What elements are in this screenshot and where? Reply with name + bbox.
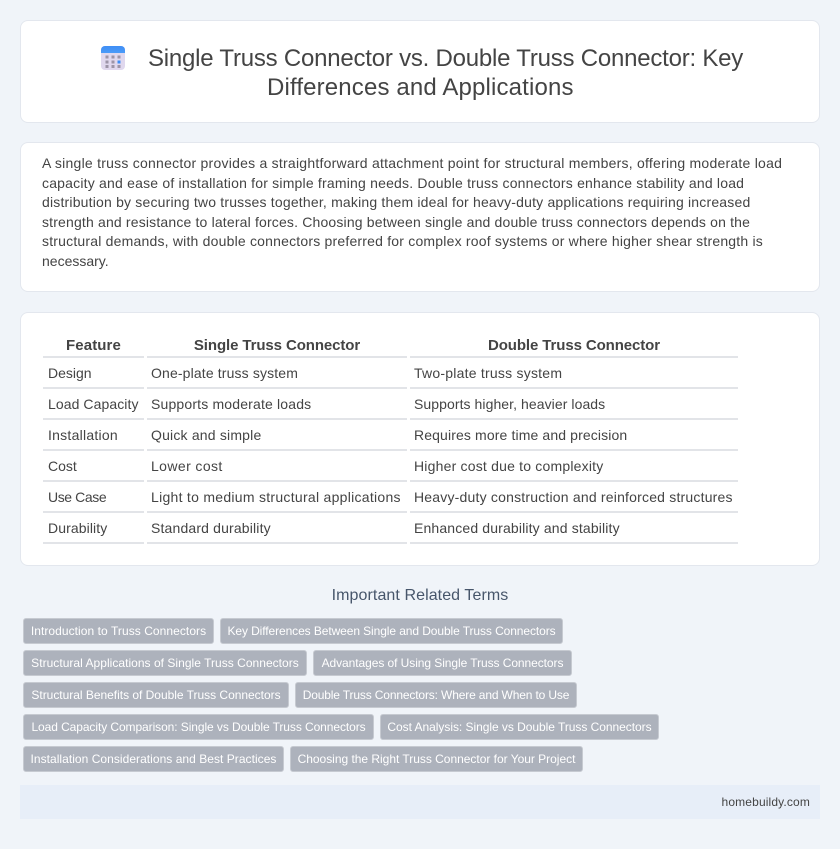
tag: Choosing the Right Truss Connector for Your Project xyxy=(298,752,575,766)
tag xyxy=(23,714,374,740)
table header: Feature: Feature xyxy=(66,337,121,354)
tag: Structural Benefits of Double Truss Connectors xyxy=(31,688,281,702)
tag: Key Differences Between Single and Double Truss Connectors xyxy=(227,624,556,638)
paragraph line 2: capacity and ease of installation for simple framing needs. Double truss connectors enhance stability and load xyxy=(42,174,744,190)
tag: Installation Considerations and Best Practices xyxy=(30,752,276,766)
Installation single: Quick and simple xyxy=(151,427,261,443)
tag xyxy=(290,746,583,772)
tag xyxy=(23,618,214,644)
table header: Single Truss Connector: Single Truss Connector xyxy=(194,337,360,354)
tag: Cost Analysis: Single vs Double Truss Connectors xyxy=(387,720,652,734)
row: Cost: Cost xyxy=(48,458,77,474)
paragraph line 1: A single truss connector provides a straightforward attachment point for structural members, offering moderate load xyxy=(42,155,782,171)
row: Use Case: Use Case xyxy=(48,489,106,505)
tag: Structural Applications of Single Truss Connectors xyxy=(31,656,299,670)
Cost double: Higher cost due to complexity xyxy=(414,458,603,474)
paragraph line 4: strength and resistance to lateral forces. Choosing between single and double truss connectors depends on the xyxy=(42,214,750,230)
tag: Load Capacity Comparison: Single vs Double Truss Connectors xyxy=(31,720,366,734)
tag: Advantages of Using Single Truss Connectors xyxy=(322,656,563,670)
tag: Introduction to Truss Connectors xyxy=(31,624,206,638)
title line 1: Single Truss Connector vs. Double Truss Connector: Key xyxy=(148,45,743,72)
tag xyxy=(23,746,284,772)
Installation double: Requires more time and precision xyxy=(414,427,627,443)
row: Durability: Durability xyxy=(48,520,107,536)
tag: Double Truss Connectors: Where and When to Use xyxy=(303,688,569,702)
paragraph line 5: structural demands, with double connectors preferred for complex roof systems or where higher shear strength is xyxy=(42,233,763,249)
Use Case single: Light to medium structural applications xyxy=(151,489,401,505)
Load single: Supports moderate loads xyxy=(151,396,311,412)
row: Installation: Installation xyxy=(48,427,118,443)
Load double: Supports higher, heavier loads xyxy=(414,396,605,412)
Design single: One-plate truss system xyxy=(151,365,298,381)
Durability double: Enhanced durability and stability xyxy=(414,520,620,536)
title line 2: Differences and Applications xyxy=(267,74,574,101)
tag xyxy=(295,682,577,708)
tag xyxy=(220,618,563,644)
row: Load Capacity: Load Capacity xyxy=(48,396,139,412)
tag list: related terms xyxy=(23,618,659,772)
row: Design: Design xyxy=(48,365,92,381)
paragraph line 3: distribution by securing two trusses together, making them ideal for heavy-duty applications requiring increased xyxy=(42,194,750,210)
Design double: Two-plate truss system xyxy=(414,365,562,381)
tag xyxy=(23,650,307,676)
heading: Important Related Terms: Important Related Terms xyxy=(332,587,508,604)
panel: title header xyxy=(20,20,820,123)
table header: Double Truss Connector: Double Truss Connector xyxy=(488,337,660,354)
paragraph line 6: necessary. xyxy=(42,252,109,268)
Cost single: Lower cost xyxy=(151,458,223,474)
tag xyxy=(380,714,659,740)
footer text: homebuildy.com xyxy=(722,795,810,809)
Durability single: Standard durability xyxy=(151,520,271,536)
panel: comparison table xyxy=(20,312,820,566)
Use Case double: Heavy-duty construction and reinforced structures xyxy=(414,489,733,505)
footer bar xyxy=(20,785,820,819)
icon: calendar grid xyxy=(101,46,125,70)
tag xyxy=(23,682,289,708)
panel: summary paragraph xyxy=(20,142,820,292)
tag xyxy=(313,650,572,676)
